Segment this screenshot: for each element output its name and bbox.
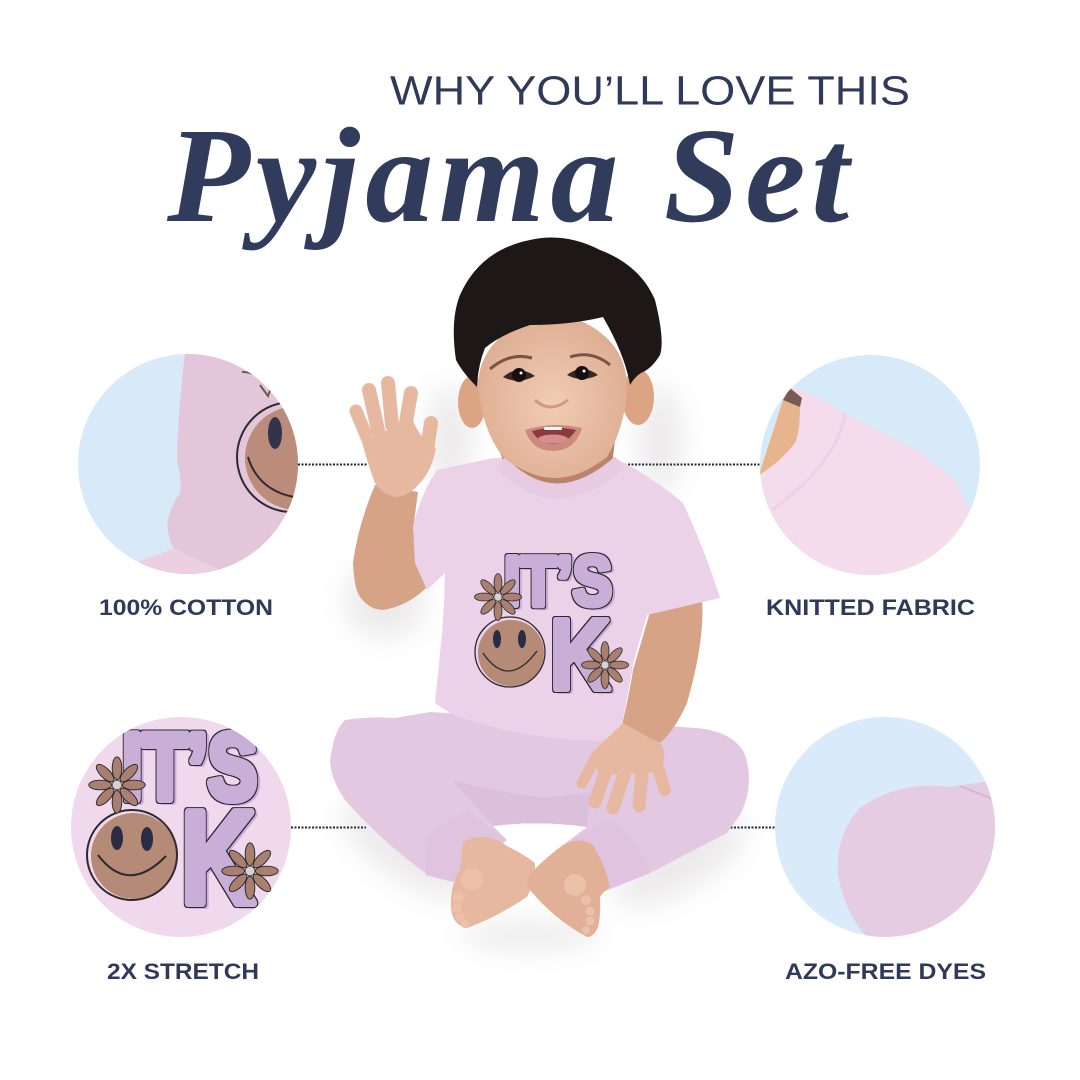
foot: right [527, 840, 610, 937]
print: flower 2 [582, 642, 628, 688]
hair [454, 238, 662, 387]
brows [490, 356, 532, 369]
connector: dyes [727, 826, 775, 828]
pants cuff: left [425, 812, 507, 882]
illustration: baby in pyjama set [328, 238, 759, 949]
left arm [353, 485, 427, 610]
neck [495, 440, 615, 488]
graphic: K letter: K [181, 784, 255, 931]
right hand [582, 723, 665, 808]
right arm [622, 600, 702, 743]
nose [535, 400, 568, 407]
hand: waving [356, 383, 436, 497]
graphic: smiley [87, 810, 177, 900]
pants folds [452, 780, 590, 827]
panel: 2x stretch detail circle [71, 714, 291, 937]
mouth [525, 425, 582, 451]
graphic: flower top [89, 757, 145, 813]
panel: 100% cotton detail circle [78, 354, 298, 574]
face [478, 312, 627, 478]
panel: azo-free dyes detail circle [775, 717, 995, 940]
title: Pyjama Set [166, 101, 853, 251]
head [454, 238, 662, 478]
tshirt print [474, 542, 628, 711]
graphic: flower bottom [222, 843, 278, 899]
label: azo-free dyes: AZO-FREE DYES [785, 959, 986, 984]
tshirt [413, 457, 720, 741]
connector: cotton [298, 464, 368, 466]
pants cuff: right [563, 818, 650, 893]
panel: knitted fabric detail circle [755, 355, 980, 578]
pants [330, 712, 749, 893]
print: K: K [550, 599, 610, 711]
neckline [500, 462, 620, 491]
label: 2x stretch: 2X STRETCH [107, 959, 259, 984]
print: IT'S: IT’S [504, 542, 612, 620]
label: knitted fabric: KNITTED FABRIC [766, 595, 975, 620]
graphic: IT'S lettering: IT’S [122, 714, 257, 819]
connector: knitted fabric [628, 464, 760, 466]
ears [458, 376, 486, 428]
eyes [503, 370, 535, 381]
print: smiley [475, 617, 545, 687]
label: 100% cotton: 100% COTTON [99, 595, 273, 620]
print: flower 1 [474, 574, 522, 620]
foot: left [451, 837, 535, 928]
connector: stretch [291, 826, 366, 828]
soft shadow [328, 385, 759, 949]
subtitle: WHY YOU’LL LOVE THIS [390, 67, 910, 113]
